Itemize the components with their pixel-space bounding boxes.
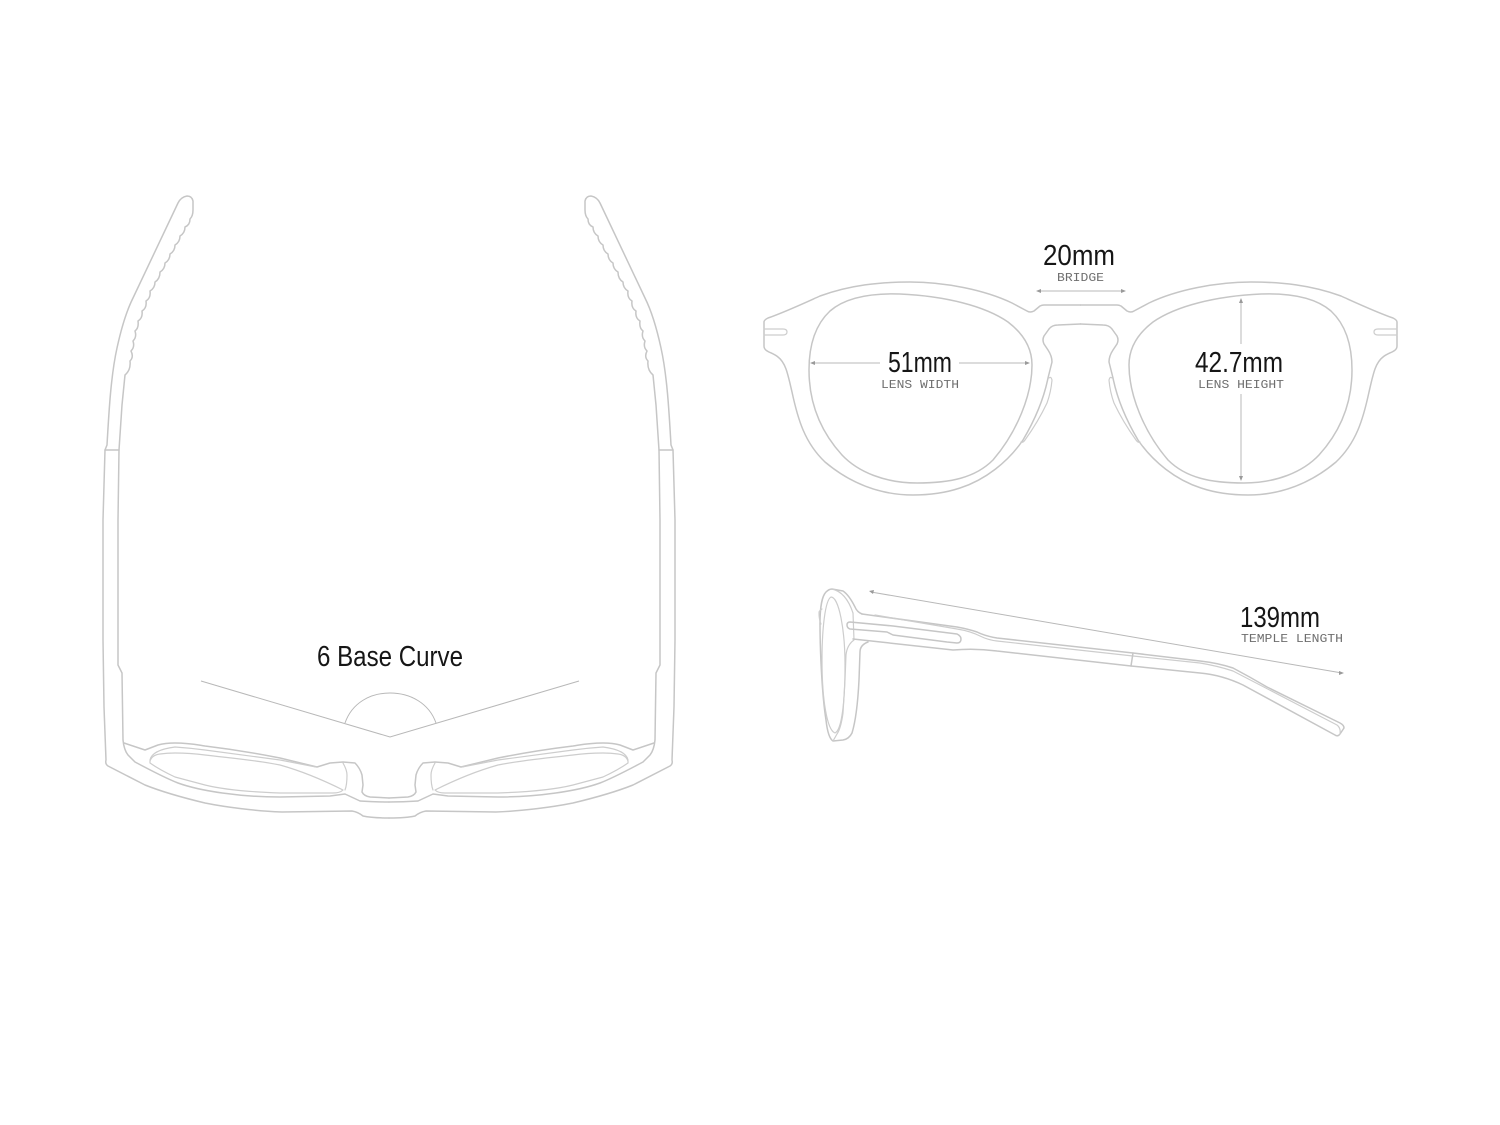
front view of glasses <box>764 240 1397 495</box>
top view of glasses <box>103 196 675 818</box>
right half of frame <box>1080 282 1397 495</box>
bridge measurement arrow <box>1036 289 1126 293</box>
side temple arm <box>847 614 1344 736</box>
lens height value: 42.7mm <box>1195 347 1283 379</box>
left temple arm and frame half <box>103 196 389 818</box>
temple length measurement arrow <box>869 590 1344 675</box>
base curve angle lines <box>201 681 579 737</box>
side view of glasses <box>819 589 1344 741</box>
base curve label: 6 Base Curve <box>317 641 463 673</box>
bridge value: 20mm <box>1043 240 1115 272</box>
lens height measurement arrows <box>1239 298 1243 481</box>
lens width value: 51mm <box>888 347 952 379</box>
right lens rim <box>1129 294 1352 483</box>
left lens rim <box>809 294 1032 483</box>
temple length caption: TEMPLE LENGTH <box>1241 632 1343 646</box>
lens width measurement arrows <box>810 361 1030 365</box>
right lens <box>435 753 628 793</box>
lens width caption: LENS WIDTH <box>881 378 959 392</box>
right temple arm and frame half <box>389 196 675 818</box>
lens height caption: LENS HEIGHT <box>1198 378 1284 392</box>
left half of frame <box>764 282 1080 495</box>
bridge caption: BRIDGE <box>1057 271 1104 285</box>
left lens <box>150 753 343 793</box>
side frame front <box>819 589 868 741</box>
temple length value: 139mm <box>1240 602 1320 634</box>
